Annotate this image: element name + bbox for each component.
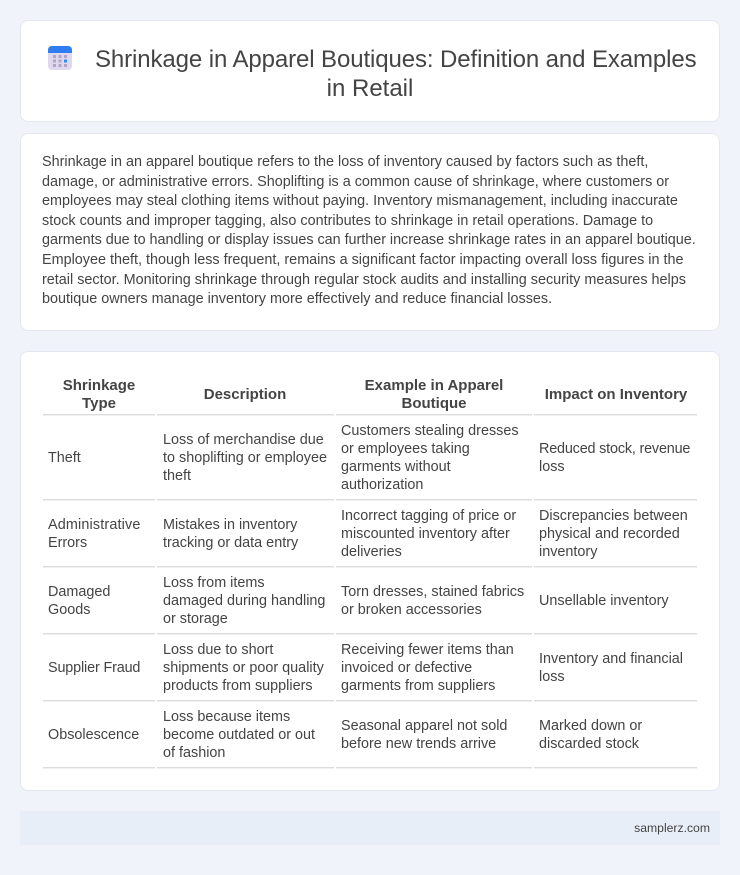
row: damaged goods: Loss from items <box>163 575 265 591</box>
row: theft: authorization <box>341 477 423 493</box>
row: administrative errors: deliveries <box>341 544 402 560</box>
row: damaged goods: Torn dresses, stained fabrics <box>341 584 524 600</box>
title: in Retail <box>327 75 413 102</box>
table <box>43 377 697 769</box>
header row: Example in Apparel <box>365 377 503 394</box>
intro paragraph: stock counts and improper tagging, also contributes to shrinkage in retail operations. Damage to <box>42 213 653 229</box>
row: supplier fraud: Receiving fewer items than <box>341 642 514 658</box>
title <box>95 46 697 102</box>
row: theft: Reduced stock, revenue <box>539 441 690 457</box>
panel: intro text <box>20 133 720 331</box>
intro paragraph: Shrinkage in an apparel boutique refers to the loss of inventory caused by factors such as theft, <box>42 154 648 170</box>
header row: Impact on Inventory <box>545 386 687 403</box>
row: administrative errors: Errors <box>48 535 87 551</box>
row: supplier fraud: garments from suppliers <box>341 678 495 694</box>
title: Shrinkage in Apparel Boutiques: Definition and Examples <box>95 46 697 73</box>
intro paragraph: employees may steal clothing items without paying. Inventory mismanagement, including inaccurate <box>42 193 678 209</box>
row: supplier fraud: Loss due to short <box>163 642 273 658</box>
header row: Shrinkage <box>63 377 135 394</box>
header row: Boutique <box>402 395 466 412</box>
row: theft <box>48 423 690 493</box>
row: administrative errors: Incorrect tagging of price or <box>341 508 516 524</box>
row: theft: loss <box>539 459 565 475</box>
row: theft: Customers stealing dresses <box>341 423 519 439</box>
header row <box>63 377 688 412</box>
row: administrative errors: Discrepancies between <box>539 508 688 524</box>
row: theft: Theft <box>48 450 81 466</box>
header row: Type <box>82 395 116 412</box>
row: administrative errors: inventory <box>539 544 597 560</box>
intro paragraph: boutique owners manage inventory more effectively and reduce financial losses. <box>42 291 552 307</box>
row: obsolescence: before new trends arrive <box>341 736 496 752</box>
panel: table card <box>20 351 720 791</box>
row: administrative errors: physical and recorded <box>539 526 680 542</box>
intro paragraph <box>42 154 696 307</box>
row: damaged goods: or broken accessories <box>341 602 482 618</box>
row: obsolescence: become outdated or out <box>163 727 315 743</box>
row: supplier fraud: shipments or poor quality <box>163 660 324 676</box>
intro paragraph: retail sector. Monitoring shrinkage through regular stock audits and installing security measures helps <box>42 272 686 288</box>
row: administrative errors <box>48 508 688 560</box>
row: supplier fraud <box>48 642 683 694</box>
row: supplier fraud: Supplier Fraud <box>48 660 140 676</box>
header row: Description <box>204 386 286 403</box>
row: administrative errors: tracking or data entry <box>163 535 298 551</box>
row: obsolescence: Seasonal apparel not sold <box>341 718 507 734</box>
row: administrative errors: miscounted inventory after <box>341 526 510 542</box>
row: theft: garments without <box>341 459 451 475</box>
row: damaged goods: Unsellable inventory <box>539 593 669 609</box>
row: damaged goods <box>48 575 669 627</box>
row: damaged goods: damaged during handling <box>163 593 325 609</box>
row: damaged goods: or storage <box>163 611 228 627</box>
row: supplier fraud: Inventory and financial <box>539 651 683 667</box>
row: theft: theft <box>163 468 191 484</box>
row: obsolescence: Marked down or <box>539 718 642 734</box>
footer text: samplerz.com <box>634 821 710 835</box>
row: damaged goods: Damaged <box>48 584 110 600</box>
row: obsolescence: of fashion <box>163 745 225 761</box>
row: obsolescence: Loss because items <box>163 709 290 725</box>
row: obsolescence: discarded stock <box>539 736 639 752</box>
row: theft: to shoplifting or employee <box>163 450 327 466</box>
row: supplier fraud: products from suppliers <box>163 678 313 694</box>
row: administrative errors: Administrative <box>48 517 140 533</box>
intro paragraph: damage, or administrative errors. Shoplifting is a common cause of shrinkage, where customers or <box>42 174 669 190</box>
footer bar <box>20 811 720 845</box>
icon: calendar <box>48 46 72 70</box>
row: theft: Loss of merchandise due <box>163 432 324 448</box>
panel: title card <box>20 20 720 122</box>
row: supplier fraud: loss <box>539 669 565 685</box>
intro paragraph: garments due to handling or display issues can further increase shrinkage rates in an apparel boutique. <box>42 232 696 248</box>
row: obsolescence: Obsolescence <box>48 727 139 743</box>
row: damaged goods: Goods <box>48 602 90 618</box>
row: obsolescence <box>48 709 642 761</box>
intro paragraph: Employee theft, though less frequent, remains a significant factor impacting overall loss figures in the <box>42 252 684 268</box>
row: supplier fraud: invoiced or defective <box>341 660 472 676</box>
row: theft: or employees taking <box>341 441 470 457</box>
row: administrative errors: Mistakes in inventory <box>163 517 297 533</box>
